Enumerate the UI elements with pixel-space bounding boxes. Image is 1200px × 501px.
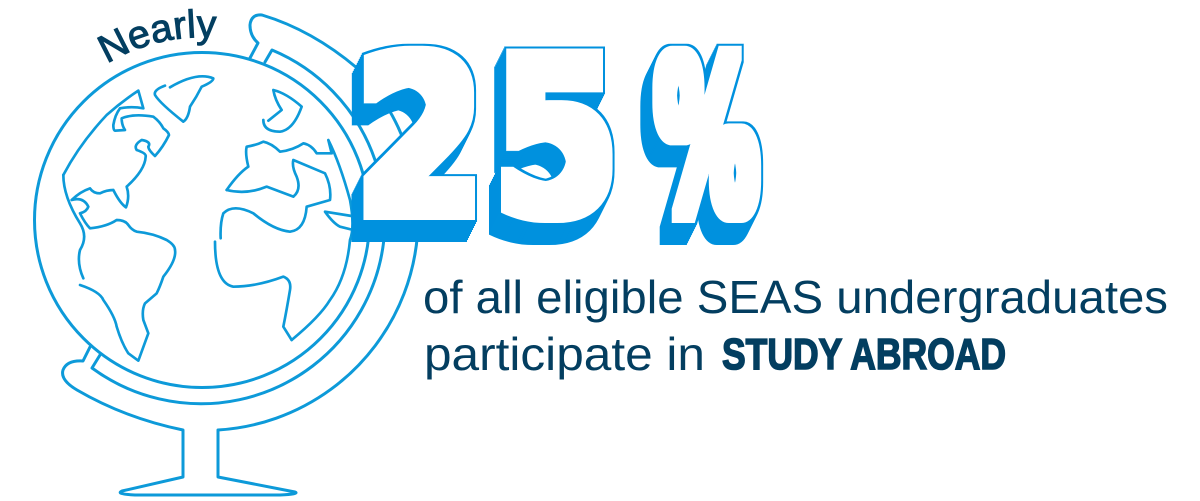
continent: the Americas bbox=[63, 91, 175, 361]
continent: Mediterranean coast bbox=[221, 160, 330, 238]
globe outline bbox=[34, 52, 370, 388]
icon: desk globe bbox=[34, 15, 418, 495]
percent sign: % bbox=[655, 13, 758, 264]
globe stand bbox=[63, 15, 418, 495]
text: second line: participate in bbox=[424, 328, 705, 380]
continent: Africa bbox=[215, 242, 292, 340]
continent: Arabia bbox=[325, 212, 353, 230]
continent: Scandinavia bbox=[263, 90, 302, 132]
text: first line: of all eligible SEAS undergraduates bbox=[423, 271, 1168, 323]
continents bbox=[63, 76, 353, 361]
continent: Eurasia bbox=[227, 140, 352, 340]
globe ring arc bbox=[92, 50, 385, 404]
continent: Greenland bbox=[155, 76, 213, 122]
digit 5: 5 bbox=[493, 14, 619, 265]
label: Nearly: Nearly bbox=[96, 8, 218, 63]
big number: 25% bbox=[355, 12, 758, 265]
digit 2: 2 bbox=[355, 12, 485, 264]
continent: Central America coast bbox=[63, 175, 84, 278]
text: STUDY ABROAD: STUDY ABROAD bbox=[722, 330, 1006, 379]
